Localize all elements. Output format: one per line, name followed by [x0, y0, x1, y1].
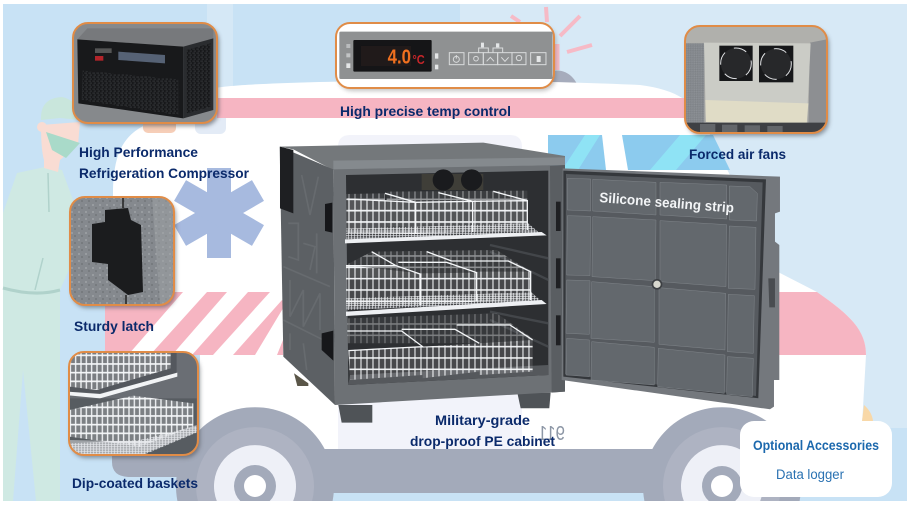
ambulance body — [112, 81, 866, 455]
top pink stripe — [217, 98, 685, 118]
door — [562, 168, 780, 409]
label: PE cabinet: Military-grade — [435, 412, 530, 428]
cabinet — [280, 143, 565, 423]
door outer shell — [562, 168, 780, 409]
panel: dip-coated baskets photo — [68, 352, 200, 458]
label: PE cabinet: drop-proof PE cabinet — [410, 433, 555, 449]
label: compressor: Refrigeration Compressor — [79, 165, 250, 181]
cabinet interior — [346, 171, 548, 385]
label: sturdy latch: Sturdy latch — [74, 318, 154, 334]
dome behind ambulance roof — [540, 70, 577, 84]
callout item: Data logger — [776, 467, 844, 482]
front hinge edge — [550, 165, 565, 393]
label: dip-coated baskets: Dip-coated baskets — [72, 475, 198, 491]
label: forced air fans: Forced air fans — [689, 146, 786, 162]
bottom shelf baskets — [347, 313, 533, 380]
cabinet feet — [294, 373, 551, 423]
cabinet top — [280, 143, 565, 170]
left wheel — [176, 407, 334, 501]
door center port — [652, 279, 662, 290]
pale rear panel — [338, 135, 522, 449]
panel: sturdy latch photo — [70, 197, 176, 308]
cabinet front frame — [333, 165, 565, 405]
sun rays behind ambulance — [511, 7, 592, 70]
middle shelf baskets — [346, 250, 542, 310]
top shelf — [345, 232, 547, 243]
peach patches — [862, 405, 873, 421]
medic figure — [3, 97, 80, 501]
panel: temperature controller: °C — [412, 53, 425, 67]
panel: forced air fans photo — [684, 26, 829, 136]
windows — [548, 135, 606, 170]
label: silicone sealing strip: Silicone sealing strip — [599, 189, 735, 216]
pink side stripe — [778, 292, 866, 355]
lower chassis — [112, 455, 200, 477]
door panels — [566, 178, 757, 397]
mirrored vehicle number: 911 — [538, 423, 565, 445]
cabinet left side — [280, 147, 335, 405]
panel: compressor photo — [73, 23, 219, 126]
panel: temperature controller — [336, 23, 556, 91]
digital temperature reading: 4.0 — [388, 46, 411, 69]
pink hazard stripes — [105, 292, 285, 355]
right wheel — [643, 407, 801, 501]
label: temperature control: High precise temp control — [340, 103, 511, 119]
top shelf baskets — [346, 191, 540, 239]
callout: optional accessories — [740, 421, 892, 497]
label: compressor: High Performance — [79, 144, 198, 160]
middle shelf — [346, 300, 547, 316]
star of life — [174, 168, 264, 258]
callout heading: Optional Accessories — [753, 438, 879, 453]
